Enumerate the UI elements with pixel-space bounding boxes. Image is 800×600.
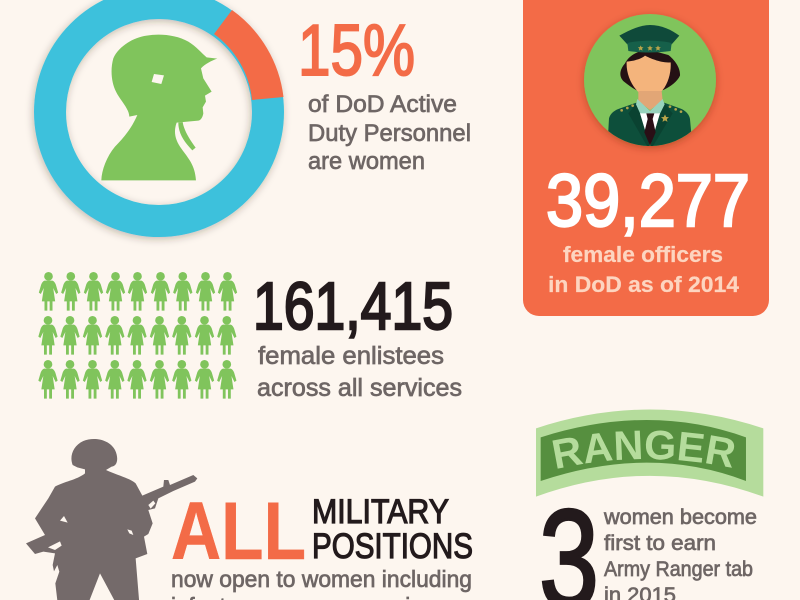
icon: female officer portrait (584, 14, 716, 148)
panel: female officers (523, 0, 769, 316)
donut chart: 15 percent women (50, 3, 284, 221)
text: female enlistees across all services: female enlistees (258, 342, 444, 370)
icon: helmeted woman profile (101, 35, 217, 180)
text: of DoD Active Duty Personnel are women (308, 91, 471, 175)
stat: 15 percent: 15% (298, 11, 415, 91)
stat: 161,415: 161,415 (253, 269, 453, 344)
text: female officers in DoD as of 2014: female officers (563, 242, 723, 267)
text: of DoD Active Duty Personnel are women: are women (308, 148, 425, 175)
text: women become first to earn Army Ranger tab in 2015: women become (603, 506, 757, 529)
headline: MILITARY POSITIONS: POSITIONS (312, 527, 473, 566)
text: of DoD Active Duty Personnel are women: Duty Personnel (308, 120, 471, 147)
headline: ALL: ALL (171, 486, 306, 577)
text: female enlistees across all services: across all services (257, 374, 462, 402)
text: women become first to earn Army Ranger tab in 2015 (603, 506, 757, 600)
headline: MILITARY POSITIONS: MILITARY (312, 493, 449, 531)
icon: soldier silhouette with rifle (26, 439, 197, 600)
stat: 39,277: 39,277 (546, 159, 750, 242)
headline: MILITARY POSITIONS (312, 493, 473, 566)
text: women become first to earn Army Ranger tab in 2015: Army Ranger tab (604, 558, 753, 581)
badge: Ranger tab: RANGER (552, 430, 734, 469)
text: now open to women including infantry, armor, reconnaissance: now open to women including (171, 566, 472, 592)
text: of DoD Active Duty Personnel are women: of DoD Active (308, 91, 457, 118)
icon grid: female enlistee figures (38, 272, 237, 399)
donut segment: 15 percent (214, 10, 284, 100)
text: female officers in DoD as of 2014 (548, 242, 740, 297)
badge: Ranger tab (536, 410, 764, 496)
text: women become first to earn Army Ranger tab in 2015: first to earn (604, 532, 716, 555)
text: female officers in DoD as of 2014: in DoD as of 2014 (548, 272, 740, 297)
text: female enlistees across all services (257, 342, 462, 402)
